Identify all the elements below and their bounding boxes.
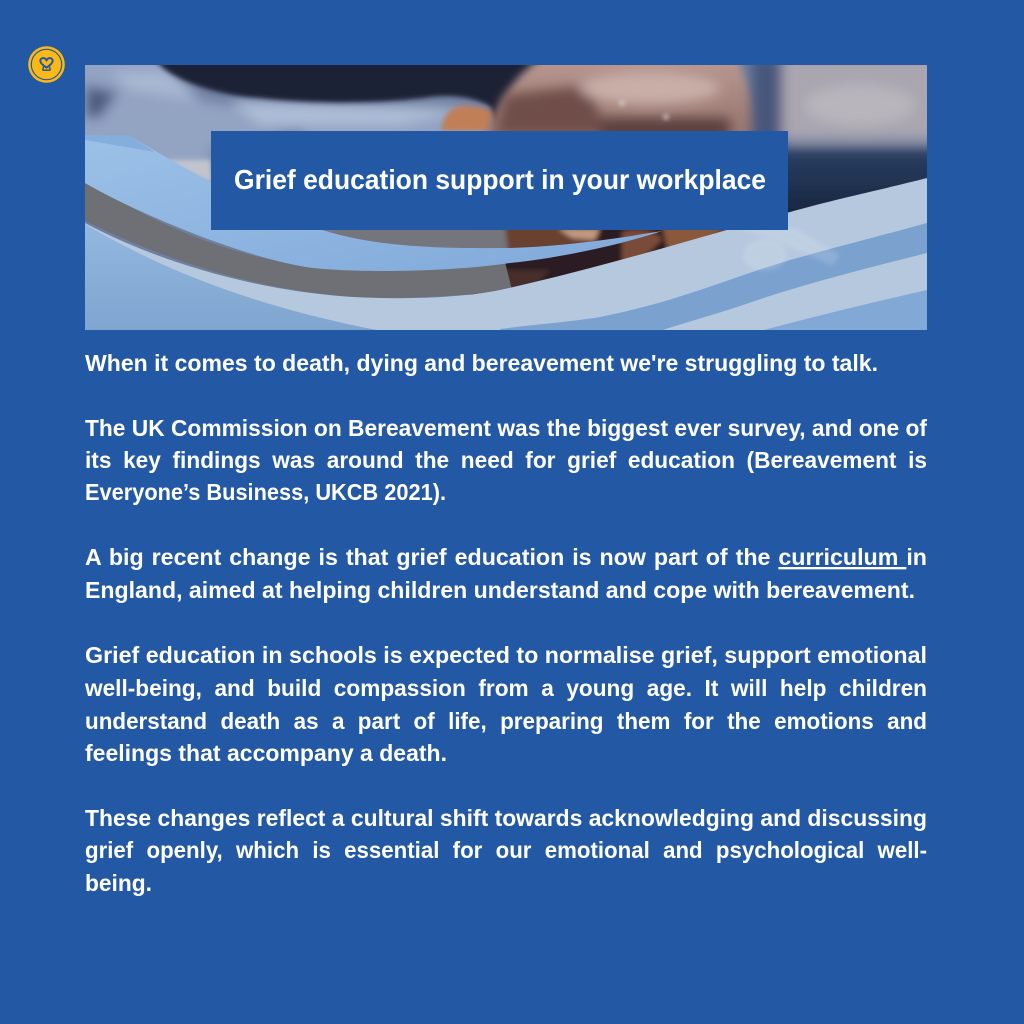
paragraph: schools: understand death as a part of life, preparing them for the emotions and	[85, 708, 927, 734]
wave: medium blue band	[500, 223, 927, 331]
icon: yellow heart badge	[28, 46, 65, 83]
infographic canvas	[28, 46, 927, 896]
wave: pale band	[85, 178, 927, 331]
paragraph: opening line: When it comes to death, dying and bereavement we're struggling to talk.	[85, 350, 878, 376]
paragraph: UK Commission: its key findings was around the need for grief education (Bereavement is	[85, 447, 927, 473]
paragraph: cultural shift	[85, 805, 927, 896]
paragraph: UK Commission	[85, 415, 927, 505]
paragraph: UK Commission: Everyone’s Business, UKCB 2021).	[85, 479, 446, 505]
paragraph: schools: feelings that accompany a death.	[85, 740, 447, 766]
paragraph: UK Commission: The UK Commission on Bereavement was the biggest ever survey, and one of	[85, 415, 927, 441]
paragraph: cultural shift: These changes reflect a cultural shift towards acknowledging and discussing	[85, 805, 927, 831]
title: Grief education support in your workplace	[234, 164, 766, 195]
title box	[211, 131, 788, 230]
wave: upper light blue band	[85, 135, 662, 271]
paragraph: cultural shift: being.	[85, 870, 152, 896]
paragraph: cultural shift: grief openly, which is essential for our emotional and psychological well-	[85, 837, 927, 863]
paragraph: schools: Grief education in schools is expected to normalise grief, support emotional	[85, 642, 927, 668]
paragraph: curriculum change: A big recent change is that grief education is now part of the curriculum in	[85, 544, 927, 570]
wave: lower left blue fill	[85, 224, 382, 331]
paragraph: curriculum change: England, aimed at helping children understand and cope with bereavement.	[85, 577, 915, 603]
paragraph: curriculum change	[85, 544, 927, 603]
wave: bottom right blue corner	[760, 290, 927, 331]
faint hand overlay	[746, 230, 838, 271]
photo: blurred hands and sleeve	[85, 65, 927, 298]
wave: grey fabric band	[85, 180, 512, 298]
paragraph: schools	[84, 642, 927, 766]
panel: hero photo with waves	[75, 50, 940, 331]
wave: darker top wedge	[85, 135, 155, 152]
paragraph: schools: well-being, and build compassion from a young age. It will help children	[84, 675, 927, 701]
body text	[84, 350, 927, 896]
